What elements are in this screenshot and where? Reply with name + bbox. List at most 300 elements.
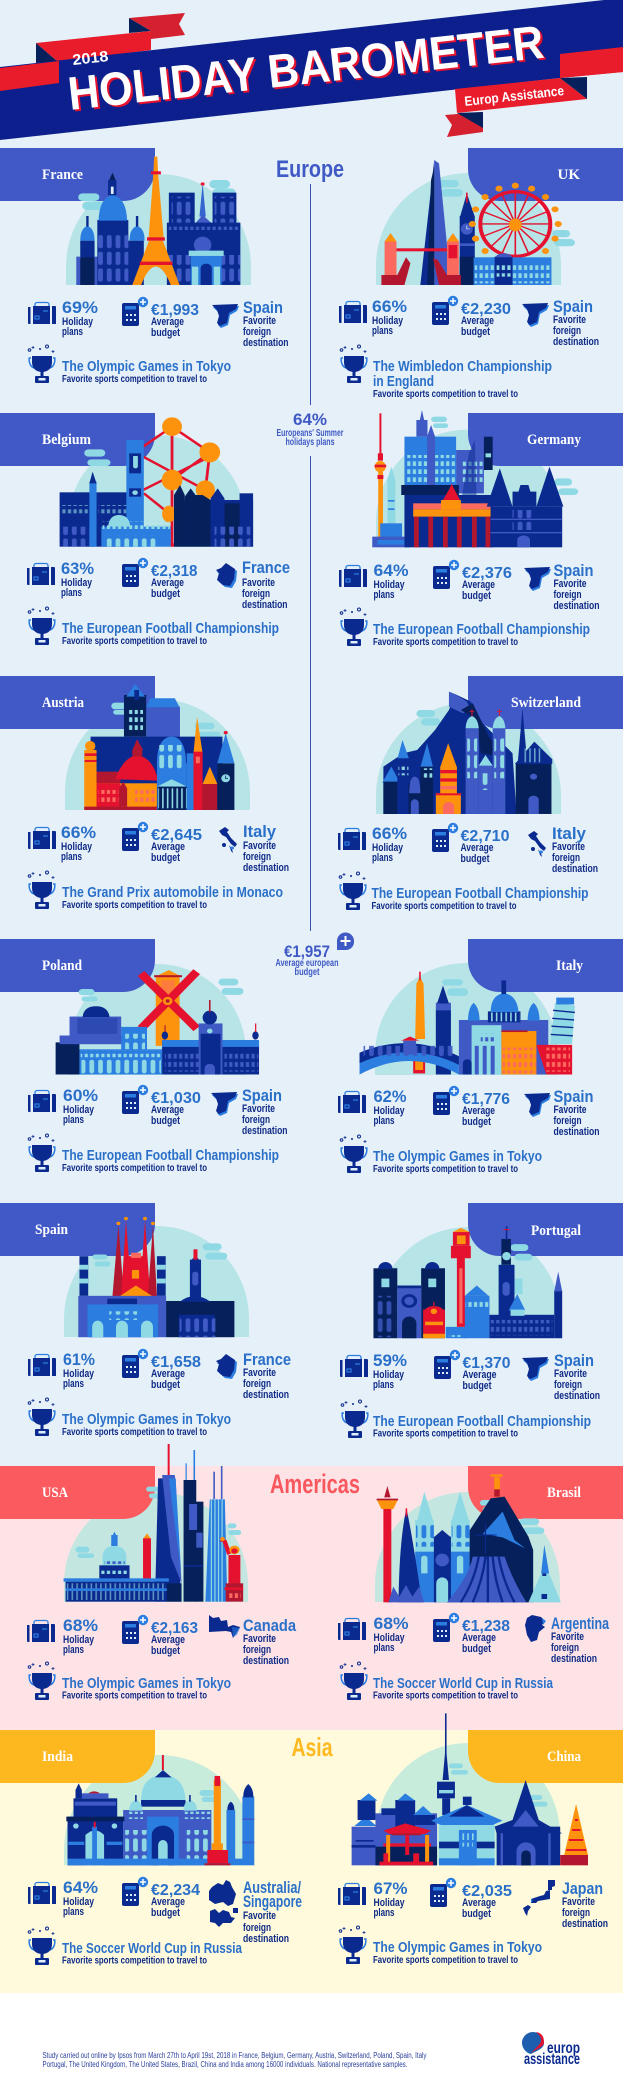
europe stat: average budget: budget xyxy=(294,966,320,978)
stat: average budget: budget xyxy=(460,853,490,865)
stat: favorite destination: destination xyxy=(554,1390,600,1402)
skyline: Berlin xyxy=(372,410,578,547)
stat: holiday plans: Holiday xyxy=(374,1105,405,1117)
stat: average budget xyxy=(433,1086,510,1128)
stat: average budget: €2,376 xyxy=(462,565,512,582)
stat: favorite destination: foreign xyxy=(243,326,271,338)
backdrop dome xyxy=(375,1492,560,1602)
stat: favorite destination: Singapore xyxy=(243,1893,302,1911)
skyline: Barcelona xyxy=(78,1217,234,1337)
country name: Belgium xyxy=(42,432,91,448)
stat: favorite destination: Favorite xyxy=(554,1368,587,1380)
logo: Europ Assistance xyxy=(522,2032,580,2068)
stat: average budget xyxy=(433,560,512,602)
stat: average budget: €2,163 xyxy=(151,1620,198,1637)
stat: average budget: Average xyxy=(151,316,184,328)
stat: favorite destination xyxy=(528,825,598,875)
stat: average budget: Average xyxy=(462,1632,496,1644)
stat: holiday plans: plans xyxy=(374,1642,394,1654)
stat: holiday plans: plans xyxy=(374,1115,394,1127)
skyline: Rome and Venice xyxy=(360,972,575,1074)
country name: Poland xyxy=(42,958,83,974)
panel: Switzerland xyxy=(338,676,623,912)
sports competition: Favorite sports competition to travel to xyxy=(62,1954,207,1966)
stat: average budget: Average xyxy=(462,1369,496,1381)
stat: favorite destination: foreign xyxy=(553,325,581,337)
stat: favorite destination: foreign xyxy=(242,1114,270,1126)
stat: average budget xyxy=(432,823,510,865)
stat: favorite destination xyxy=(212,299,289,349)
logo: Europ Assistance: assistance xyxy=(524,2051,580,2068)
stat: holiday plans xyxy=(339,562,409,601)
sports competition: The Olympic Games in Tokyo xyxy=(373,1940,542,1956)
stat: average budget: Average xyxy=(462,1105,495,1117)
europe stat: summer plans xyxy=(276,410,344,448)
stat: average budget: €1,030 xyxy=(151,1090,201,1107)
sports competition: The Olympic Games in Tokyo xyxy=(62,1412,231,1428)
stat: favorite destination: Italy xyxy=(552,825,587,843)
skyline: Swiss xyxy=(382,692,552,814)
stat: holiday plans xyxy=(27,560,94,599)
backdrop dome xyxy=(376,1743,560,1865)
stat: favorite destination: Favorite xyxy=(562,1896,595,1908)
stat: holiday plans: 69% xyxy=(62,299,98,317)
sports competition xyxy=(28,1927,243,1966)
ribbon: Europ Assistance: Europ Assistance xyxy=(464,83,565,109)
stat: favorite destination: France xyxy=(243,1351,291,1369)
stat: favorite destination xyxy=(522,298,599,348)
stat: favorite destination xyxy=(216,1351,291,1401)
stat: favorite destination: Spain xyxy=(242,1087,282,1105)
panel: USA xyxy=(0,1444,297,1702)
stat: average budget: budget xyxy=(462,1908,491,1920)
heading: Asia: Asia xyxy=(292,1732,333,1762)
stat: favorite destination: foreign xyxy=(554,589,582,601)
stat: favorite destination: Favorite xyxy=(554,578,586,590)
panel: Belgium xyxy=(0,413,290,647)
sports competition xyxy=(28,345,231,385)
country tab xyxy=(0,676,155,729)
sports competition: The European Football Championship xyxy=(62,621,279,637)
stat: holiday plans: 66% xyxy=(372,825,407,843)
stat: holiday plans: Holiday xyxy=(63,1634,95,1646)
stat: holiday plans xyxy=(28,1351,95,1390)
stat: holiday plans: Holiday xyxy=(374,579,405,591)
sports competition xyxy=(340,345,552,400)
stat: favorite destination: Favorite xyxy=(243,315,276,327)
stat: average budget: budget xyxy=(151,1907,180,1919)
stat: favorite destination xyxy=(219,823,289,874)
country tab xyxy=(468,148,623,201)
stat: favorite destination: Favorite xyxy=(242,577,275,589)
sports competition xyxy=(28,871,283,911)
sports competition: Favorite sports competition to travel to xyxy=(62,1426,207,1438)
skyline: London xyxy=(381,160,575,285)
backdrop dome xyxy=(66,174,251,285)
stat: average budget: Average xyxy=(462,579,495,591)
stat: favorite destination: destination xyxy=(562,1918,608,1930)
stat: favorite destination: foreign xyxy=(243,1922,271,1934)
sports competition: The Soccer World Cup in Russia xyxy=(373,1676,554,1692)
stat: holiday plans: Holiday xyxy=(62,316,94,328)
stat: holiday plans xyxy=(28,1879,98,1918)
logo: Europ Assistance: europ xyxy=(547,2040,580,2057)
stat: average budget: €2,035 xyxy=(462,1883,512,1900)
europe stat: average budget xyxy=(276,932,354,978)
stat: favorite destination: France xyxy=(242,559,290,577)
year label: 2018 xyxy=(72,48,109,69)
country tab xyxy=(0,148,155,201)
stat: holiday plans: 67% xyxy=(374,1880,408,1898)
stat: holiday plans xyxy=(338,1615,409,1654)
panel: Poland xyxy=(0,939,288,1174)
backdrop dome xyxy=(64,1492,248,1602)
redraw of red ribbon overlaps xyxy=(0,47,623,91)
stat: average budget: €2,710 xyxy=(460,828,510,845)
europe stat: summer plans: holidays plans xyxy=(286,436,335,448)
sports competition: The Olympic Games in Tokyo xyxy=(62,359,231,375)
stat: favorite destination xyxy=(523,1880,608,1930)
panel: Austria xyxy=(0,676,289,911)
heading: Americas: Americas xyxy=(270,1469,360,1499)
stat: favorite destination: destination xyxy=(242,599,288,611)
sports competition xyxy=(28,1398,231,1438)
stat: favorite destination: Favorite xyxy=(552,841,585,853)
panel: Germany xyxy=(339,410,623,648)
europe stat: average budget: €1,957 xyxy=(284,942,330,961)
stat: average budget: €1,776 xyxy=(462,1091,510,1108)
heading: Europe: Europe xyxy=(276,156,344,183)
stat: holiday plans: Holiday xyxy=(63,1104,95,1116)
sports competition xyxy=(340,1135,542,1175)
skyline: Paris xyxy=(76,157,240,285)
stat: holiday plans: 64% xyxy=(63,1879,98,1897)
stat: favorite destination: Favorite xyxy=(553,314,586,326)
panel: France xyxy=(0,148,289,385)
stat: favorite destination xyxy=(524,1088,600,1138)
centre divider line top xyxy=(310,184,312,405)
stat: favorite destination: destination xyxy=(242,1125,288,1137)
stat: holiday plans xyxy=(338,1088,407,1127)
stat: favorite destination: foreign xyxy=(243,1378,271,1390)
stat: holiday plans: 59% xyxy=(373,1352,407,1370)
country name: Germany xyxy=(527,432,581,448)
sports competition: Favorite sports competition to travel to xyxy=(62,373,207,385)
stat: average budget xyxy=(122,297,199,339)
skyline: Brussels xyxy=(60,417,253,547)
stat: favorite destination: destination xyxy=(243,1655,289,1667)
stat: holiday plans: plans xyxy=(63,1114,84,1126)
sports competition: The Wimbledon Championship xyxy=(373,359,552,375)
stat: favorite destination xyxy=(211,1087,288,1137)
sports competition: Favorite sports competition to travel to xyxy=(372,900,516,912)
stat: holiday plans xyxy=(340,1352,407,1391)
stat: holiday plans: 68% xyxy=(374,1615,409,1633)
stat: holiday plans: 62% xyxy=(374,1088,407,1106)
stat: favorite destination: Spain xyxy=(554,1088,594,1106)
stat: average budget xyxy=(434,1350,511,1392)
sports competition: Favorite sports competition to travel to xyxy=(373,1163,518,1175)
sports competition: Favorite sports competition to travel to xyxy=(373,1690,518,1702)
stat: average budget: budget xyxy=(462,590,491,602)
country tab xyxy=(468,1730,623,1783)
stat: holiday plans xyxy=(338,1880,408,1919)
backdrop dome xyxy=(65,699,250,810)
country name: India xyxy=(42,1749,73,1765)
country tab xyxy=(0,413,155,466)
stat: holiday plans: 60% xyxy=(63,1087,98,1105)
stat: favorite destination: destination xyxy=(243,1933,289,1945)
stat: favorite destination: destination xyxy=(551,1653,597,1665)
sports competition xyxy=(339,1926,542,1966)
sports competition: Favorite sports competition to travel to xyxy=(373,388,518,400)
backdrop dome xyxy=(64,1226,249,1337)
stat: average budget xyxy=(433,1613,510,1655)
sports competition: Favorite sports competition to travel to xyxy=(62,1162,207,1174)
stat: favorite destination: destination xyxy=(554,600,600,612)
sports competition: in England xyxy=(373,374,434,390)
sports competition xyxy=(28,1134,279,1174)
stat: holiday plans: plans xyxy=(63,1378,84,1390)
stat: average budget xyxy=(430,1878,512,1920)
stat: holiday plans: Holiday xyxy=(374,1632,405,1644)
country tab xyxy=(468,413,623,466)
stat: holiday plans: plans xyxy=(61,587,82,599)
country name: Brasil xyxy=(547,1485,581,1501)
country name: Portugal xyxy=(531,1223,581,1239)
backdrop dome xyxy=(64,1755,254,1865)
stat: average budget: Average xyxy=(151,1104,184,1116)
stat: favorite destination xyxy=(216,559,290,611)
backdrop dome xyxy=(376,173,561,285)
stat: favorite destination xyxy=(209,1615,297,1667)
country tab xyxy=(468,1466,623,1519)
stat: average budget xyxy=(122,558,198,600)
sports competition xyxy=(340,608,590,648)
stat: holiday plans xyxy=(338,825,407,864)
stat: average budget: €1,238 xyxy=(462,1618,510,1635)
stat: average budget: Average xyxy=(151,1896,185,1908)
backdrop dome xyxy=(376,703,561,814)
europe stat: average budget: Average european xyxy=(276,957,338,969)
country name: Austria xyxy=(42,695,84,711)
top ribbon tail xyxy=(129,13,185,39)
ribbon: Europ Assistance xyxy=(455,77,587,113)
country tab xyxy=(468,676,623,729)
stat: favorite destination: Favorite xyxy=(551,1631,584,1643)
stat: holiday plans: plans xyxy=(373,1379,394,1391)
stat: holiday plans xyxy=(28,1087,98,1126)
stat: average budget: budget xyxy=(151,1645,180,1657)
stat: favorite destination: destination xyxy=(243,862,289,874)
centre divider line bottom xyxy=(310,456,312,931)
panel: UK xyxy=(339,148,623,400)
country tab xyxy=(0,1466,155,1519)
stat: favorite destination: destination xyxy=(554,1126,600,1138)
sports competition: Favorite sports competition to travel to xyxy=(62,1690,207,1702)
stat: holiday plans: Holiday xyxy=(61,577,93,589)
footnote xyxy=(42,2051,426,2069)
stat: average budget: €2,645 xyxy=(151,827,202,844)
stat: average budget: Average xyxy=(151,841,185,853)
stat: average budget: €1,658 xyxy=(151,1354,201,1371)
stat: average budget: €2,230 xyxy=(461,301,511,318)
stat: holiday plans: plans xyxy=(63,1644,84,1656)
stat: favorite destination: Italy xyxy=(243,823,277,841)
sports competition: The Olympic Games in Tokyo xyxy=(373,1149,542,1165)
stat: holiday plans: plans xyxy=(62,326,83,338)
stat: favorite destination: Spain xyxy=(553,298,593,316)
backdrop dome xyxy=(375,963,558,1075)
stat: favorite destination: foreign xyxy=(242,588,270,600)
stat: holiday plans xyxy=(27,1617,98,1656)
skyline: Delhi and Agra xyxy=(66,1755,254,1865)
stat: favorite destination: Japan xyxy=(562,1880,603,1898)
stat: favorite destination xyxy=(525,1615,610,1665)
country name: Spain xyxy=(35,1222,69,1238)
stat: average budget: Average xyxy=(151,1368,185,1380)
stat: average budget: Average xyxy=(462,1897,496,1909)
country name: France xyxy=(42,167,83,183)
stat: favorite destination: Favorite xyxy=(243,1910,276,1922)
stat: average budget: budget xyxy=(462,1380,492,1392)
sports competition: The Soccer World Cup in Russia xyxy=(62,1941,243,1957)
country name: Switzerland xyxy=(511,695,582,711)
stat: holiday plans xyxy=(339,298,407,337)
stat: favorite destination: Canada xyxy=(243,1617,297,1635)
panel: Brasil xyxy=(338,1466,623,1702)
stat: favorite destination: Favorite xyxy=(243,840,276,852)
panel: China xyxy=(338,1713,623,1966)
panel: Spain xyxy=(0,1203,291,1438)
country name: China xyxy=(547,1749,581,1765)
stat: holiday plans: Holiday xyxy=(372,842,404,854)
main title: HOLIDAY BAROMETER xyxy=(65,15,546,120)
stat: average budget: Average xyxy=(151,1634,185,1646)
stat: average budget: budget xyxy=(462,1643,491,1655)
lower ribbon tail xyxy=(445,112,483,137)
stat: average budget: budget xyxy=(151,588,180,600)
stat: favorite destination xyxy=(209,1879,302,1945)
ribbon: 2018 xyxy=(36,31,151,63)
stat: favorite destination: Spain xyxy=(554,562,594,580)
stat: holiday plans: 64% xyxy=(374,562,409,580)
stat: holiday plans: plans xyxy=(63,1906,84,1918)
stat: average budget: €1,993 xyxy=(151,302,199,319)
stat: holiday plans: plans xyxy=(61,851,82,863)
header banner xyxy=(0,0,623,140)
stat: average budget: budget xyxy=(151,1115,180,1127)
stat: average budget: €2,318 xyxy=(151,563,198,580)
stat: favorite destination: Favorite xyxy=(242,1103,275,1115)
stat: favorite destination: destination xyxy=(243,1389,289,1401)
sports competition xyxy=(340,1662,554,1702)
sports competition xyxy=(339,872,589,912)
sports competition: Favorite sports competition to travel to xyxy=(373,1428,518,1440)
stat: average budget xyxy=(122,1877,200,1919)
stat: favorite destination: Favorite xyxy=(243,1633,276,1645)
section background: Europe xyxy=(0,0,623,1466)
footnote: Portugal, The United Kingdom, The United States, Brazil, China and India among 16000 individuals. National representative samples. xyxy=(42,2060,408,2069)
europe stat: summer plans: Europeans' Summer xyxy=(276,427,344,439)
stat: favorite destination: Favorite xyxy=(243,1367,276,1379)
stat: holiday plans: Holiday xyxy=(374,1897,405,1909)
stat: favorite destination: foreign xyxy=(554,1379,582,1391)
stat: holiday plans: plans xyxy=(374,1907,394,1919)
stat: favorite destination xyxy=(522,1352,600,1402)
stat: average budget: budget xyxy=(461,326,490,338)
stat: holiday plans: plans xyxy=(372,852,393,864)
backdrop dome xyxy=(68,435,246,547)
stat: holiday plans: Holiday xyxy=(373,1369,405,1381)
skyline: New York and Chicago xyxy=(64,1444,243,1602)
skyline: Rio and Brasilia xyxy=(377,1474,561,1602)
stat: holiday plans: plans xyxy=(372,325,393,337)
stat: holiday plans: Holiday xyxy=(63,1368,95,1380)
stat: holiday plans: Holiday xyxy=(61,841,93,853)
sports competition: Favorite sports competition to travel to xyxy=(373,1954,518,1966)
stat: average budget: budget xyxy=(151,852,180,864)
stat: holiday plans: plans xyxy=(374,589,394,601)
stat: favorite destination xyxy=(524,562,600,612)
sports competition: The European Football Championship xyxy=(62,1148,279,1164)
country tab xyxy=(0,1730,155,1783)
stat: favorite destination: Spain xyxy=(554,1352,594,1370)
stat: favorite destination: foreign xyxy=(552,852,580,864)
country tab xyxy=(468,1203,623,1256)
stat: favorite destination: Favorite xyxy=(554,1104,586,1116)
sports competition xyxy=(28,607,279,647)
section background: Americas xyxy=(0,1466,623,1730)
sports competition: Favorite sports competition to travel to xyxy=(62,635,207,647)
skyline: Lisbon xyxy=(373,1226,562,1338)
sports competition: Favorite sports competition to travel to xyxy=(62,899,207,911)
stat: favorite destination: foreign xyxy=(243,1644,271,1656)
red ribbon ends xyxy=(0,47,623,91)
stat: average budget: Average xyxy=(461,315,494,327)
stat: favorite destination: destination xyxy=(553,336,599,348)
stat: average budget: €2,234 xyxy=(151,1882,200,1899)
sports competition: The Olympic Games in Tokyo xyxy=(62,1676,231,1692)
stat: holiday plans: 63% xyxy=(61,560,94,578)
country tab xyxy=(0,939,155,992)
stat: holiday plans: Holiday xyxy=(372,315,404,327)
stat: average budget xyxy=(122,1615,198,1657)
stat: average budget xyxy=(122,1349,201,1391)
stat: average budget xyxy=(122,1085,201,1127)
country tab xyxy=(468,939,623,992)
backdrop dome xyxy=(68,964,246,1075)
stat: favorite destination: destination xyxy=(552,863,598,875)
stat: average budget: budget xyxy=(151,327,180,339)
panel: Italy xyxy=(338,939,623,1175)
stat: favorite destination: foreign xyxy=(562,1907,590,1919)
stat: average budget: Average xyxy=(151,577,184,589)
main title: HOLIDAY BAROMETER xyxy=(67,17,548,122)
country tab xyxy=(0,1203,155,1256)
backdrop dome xyxy=(376,1227,561,1338)
stat: favorite destination: Australia/ xyxy=(243,1879,301,1897)
stat: holiday plans: Holiday xyxy=(63,1896,95,1908)
stat: holiday plans: 68% xyxy=(63,1617,98,1635)
stat: average budget: Average xyxy=(460,842,494,854)
stat: holiday plans: 66% xyxy=(61,824,96,842)
stat: holiday plans: 66% xyxy=(372,298,407,316)
stat: favorite destination: Spain xyxy=(243,299,283,317)
sports competition: The Grand Prix automobile in Monaco xyxy=(62,885,283,901)
section background: Asia xyxy=(0,1730,623,1993)
country name: USA xyxy=(42,1485,68,1501)
